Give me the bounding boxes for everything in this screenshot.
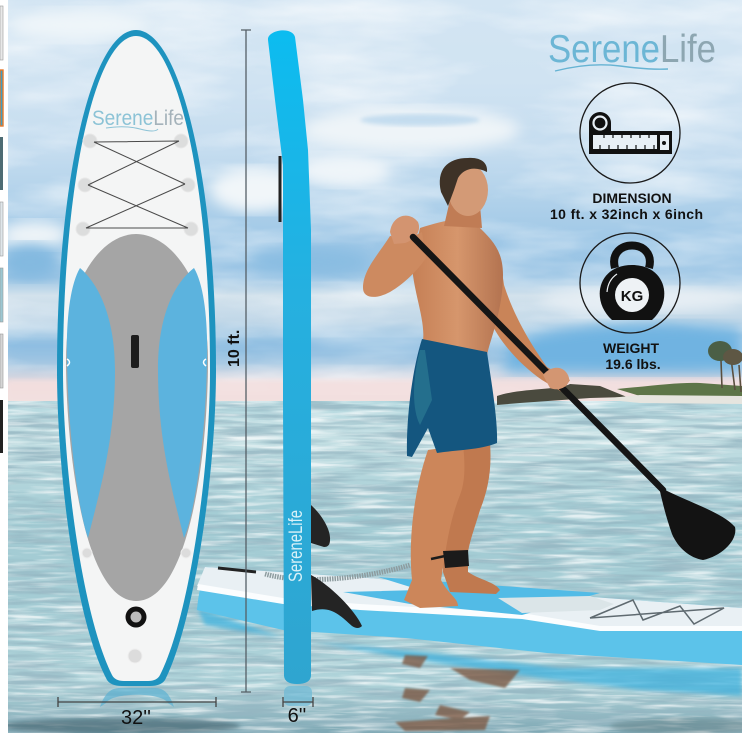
width measure: 32 inches: 32'' [121,707,151,729]
thickness measure: 6 inches [283,697,313,727]
board reflection [100,688,174,707]
lower hand [543,368,569,389]
bungee cords [590,600,724,624]
weight text [603,340,661,372]
paddle board side view [268,30,362,706]
board logo: SereneLife [92,107,184,130]
left arm [363,232,426,297]
weight text: WEIGHT [603,340,659,356]
side view body [268,30,311,684]
dimension text [550,190,703,222]
swim shorts [407,339,497,457]
D-rings [67,359,206,366]
thickness measure: 6 inches: 6'' [288,705,306,727]
bungee lines [86,141,188,228]
height measure: 10 ft: 10 ft. [226,330,243,367]
board side [197,567,742,665]
blue deck pad [343,577,600,615]
reflection of paddler [395,655,520,731]
sea [0,401,750,734]
raised hand [390,216,419,244]
paddle blade [659,487,735,560]
white rail stripe [197,584,742,631]
paddler [363,158,735,608]
board white deck [63,36,210,681]
blue pad right [158,268,207,538]
height measure: 10 ft [226,30,251,692]
water reflection of board [197,608,742,696]
sky [0,0,742,402]
tail rings [82,548,191,663]
island with palms [497,341,743,405]
icon: kettlebell weight [580,233,680,333]
board outline [57,30,216,686]
side view logo: SereneLife [286,510,307,582]
torso [412,220,503,355]
icon: kettlebell weight: KG [621,288,643,305]
weight text: 19.6 lbs. [605,356,661,372]
paddle shaft [413,237,663,490]
paddle board in the water [197,565,742,731]
side view strap [278,156,282,222]
thumbnail strip [0,6,3,453]
right arm [490,260,570,392]
bungee attachment rings [76,134,198,236]
back leg [443,443,500,594]
side view reflection [284,686,312,706]
paddle board front view [57,30,216,686]
carry handle [131,335,139,368]
ankle leash strap [443,550,469,568]
air valve [126,606,146,628]
grey traction pad [66,234,208,601]
head [448,164,488,216]
side view fins [311,505,362,628]
brand logo: SereneLife [548,28,716,71]
blue pad left [67,268,115,538]
coiled leash [265,565,410,580]
hair [440,158,487,206]
icon: measuring tape [580,83,680,183]
width measure: 32 inches [58,697,216,729]
neck [444,200,482,228]
dimension text: DIMENSION [592,190,672,206]
dimension text: 10 ft. x 32inch x 6inch [550,206,703,222]
front leg [404,445,464,608]
board deck [197,567,742,628]
